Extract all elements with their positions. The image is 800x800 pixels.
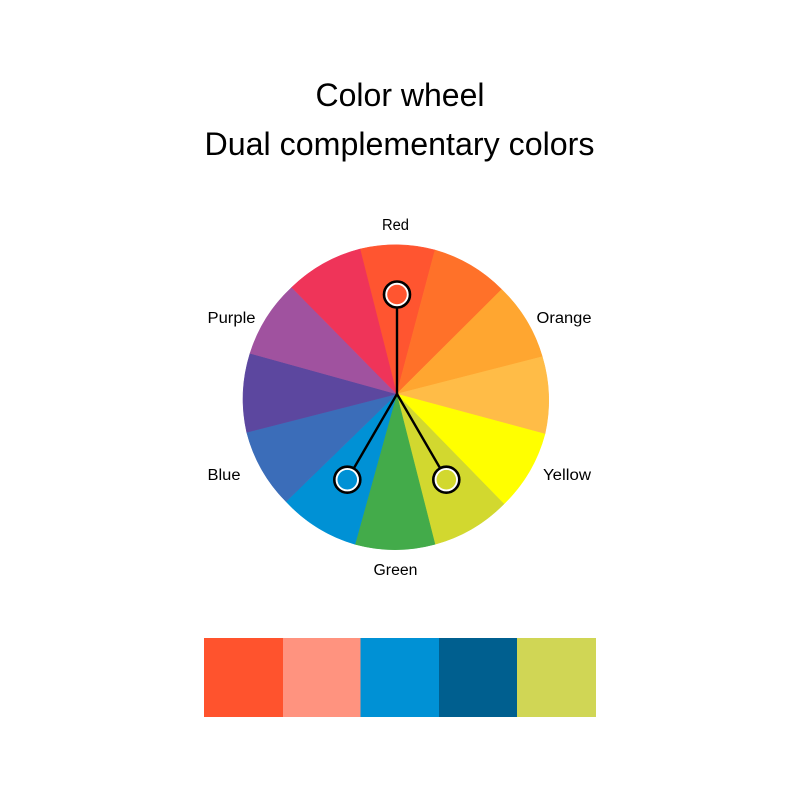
wedge: indigo — [243, 353, 397, 432]
wedge: purple — [250, 287, 397, 394]
swatch: navy — [439, 638, 518, 717]
swatch: salmon — [283, 638, 361, 717]
wedge: mid blue — [247, 394, 397, 502]
wedge: crimson — [292, 249, 397, 394]
wedge: yellow-orange — [397, 357, 549, 434]
label: Orange: Orange — [536, 310, 592, 327]
label: Purple: Purple — [208, 310, 256, 327]
label: Red: Red — [382, 217, 409, 234]
marker: blue — [334, 467, 360, 493]
wedge: blue — [286, 394, 397, 544]
label: Yellow: Yellow — [543, 467, 592, 484]
wedge: orange — [397, 289, 542, 394]
marker: red — [384, 282, 410, 308]
wedge: yellow-green — [397, 394, 504, 544]
title: Color wheel — [316, 77, 484, 113]
title: Dual complementary colors — [204, 126, 594, 162]
wedge: red — [360, 245, 435, 394]
connector lines — [354, 306, 440, 468]
swatch: red — [204, 638, 284, 717]
color wheel — [243, 245, 549, 550]
swatch: blue — [360, 638, 440, 717]
swatch: lime — [517, 638, 596, 717]
label: Blue: Blue — [208, 467, 240, 484]
label: Green: Green — [374, 562, 418, 579]
wedge: red-orange — [397, 250, 502, 394]
wedge: green — [355, 394, 435, 550]
color palette — [204, 638, 596, 717]
wedge: yellow — [397, 394, 545, 504]
marker: yellow-green — [433, 467, 459, 493]
title — [204, 77, 594, 162]
